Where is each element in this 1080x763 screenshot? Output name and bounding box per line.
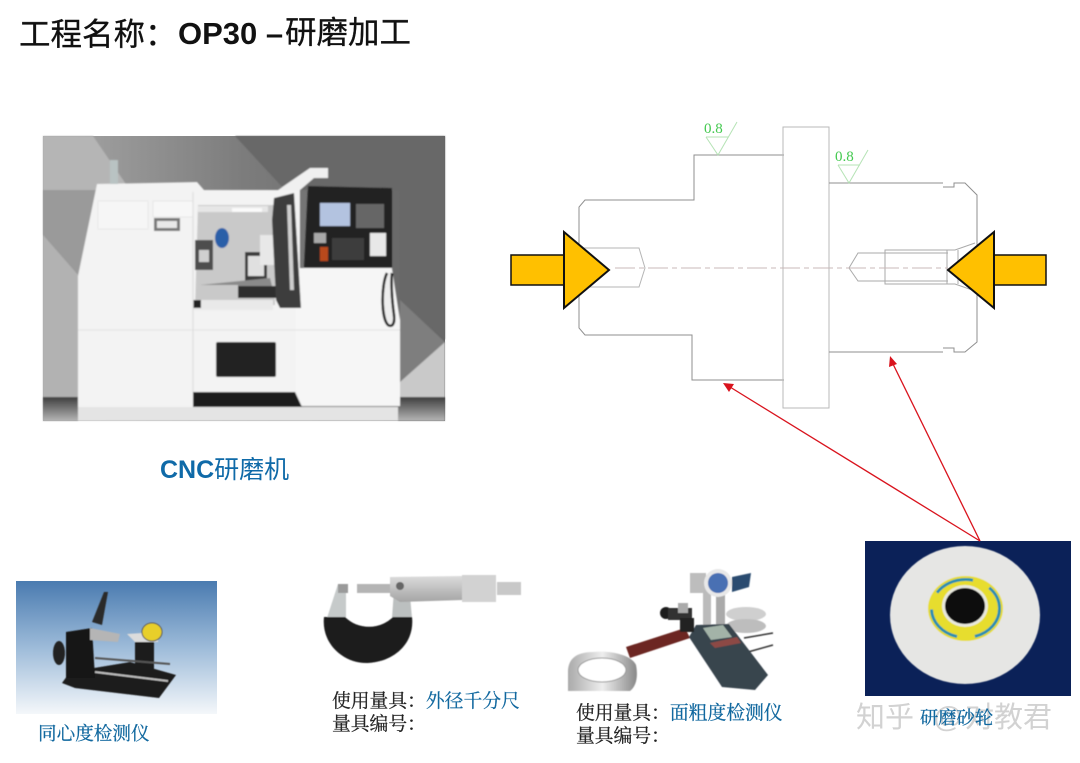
machine body	[78, 182, 400, 407]
title: 工程名称：	[19, 9, 177, 55]
title	[19, 9, 411, 55]
arrow: wheel to right surface	[889, 356, 980, 541]
surface roughness symbol right	[835, 149, 868, 183]
left centre hole	[580, 248, 645, 287]
arrow: right clamp	[948, 232, 1046, 308]
arrow: left clamp	[511, 232, 609, 308]
right shaft outline	[829, 183, 977, 352]
caption: micrometer: 使用量具：外径千分尺 量具编号：	[332, 691, 520, 735]
left body details	[110, 160, 118, 184]
watermark: 对教君	[965, 702, 1052, 734]
watermark: @	[933, 702, 962, 734]
technical drawing: shaft cross-section	[579, 127, 977, 408]
photo: concentricity tester	[16, 581, 217, 714]
watermark	[856, 702, 1052, 734]
photo: micrometer	[324, 575, 521, 663]
photo: surface roughness tester	[568, 569, 773, 691]
arrow: wheel to left surface	[723, 383, 980, 541]
watermark: 知乎	[856, 702, 914, 734]
flange	[783, 127, 829, 408]
surface roughness symbol left	[704, 121, 737, 155]
caption: roughness tester: 使用量具：面粗度检测仪 量具编号：	[576, 703, 783, 747]
photo: grinding wheel	[865, 541, 1071, 696]
control panel	[304, 186, 392, 268]
centre line	[615, 267, 948, 269]
caption: CNC grinder: CNC研磨机	[160, 456, 289, 484]
caption: grinding wheel: 研磨砂轮	[920, 708, 993, 728]
surface roughness symbol left: 0.8	[704, 121, 723, 137]
title: OP30 –	[178, 16, 283, 51]
right threaded hole	[849, 243, 975, 291]
photo: CNC grinding machine	[43, 136, 445, 421]
surface roughness symbol right: 0.8	[835, 149, 854, 165]
title: 研磨加工	[285, 14, 411, 50]
left shaft outline	[579, 155, 784, 380]
caption: concentricity tester: 同心度检测仪	[38, 724, 150, 745]
